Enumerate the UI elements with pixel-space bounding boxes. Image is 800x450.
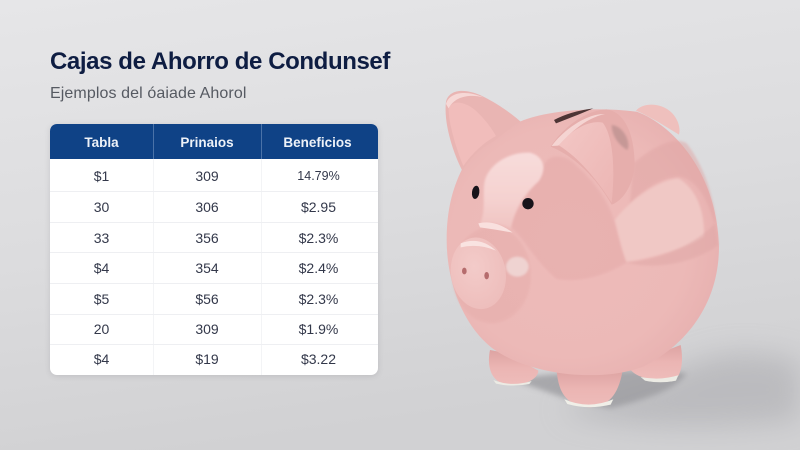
panel: data table: $4 — [94, 260, 109, 276]
body — [447, 109, 719, 375]
panel: data table: 309 — [195, 321, 219, 337]
panel: data table: 14.79% — [297, 169, 340, 183]
shaded band under right ear — [510, 157, 627, 280]
body window highlight — [615, 178, 704, 262]
panel: data table: 354 — [195, 260, 219, 276]
title: Cajas de Ahorro de Condunsef — [50, 48, 390, 75]
panel: data table: 30 — [94, 199, 109, 215]
panel: data table: 309 — [195, 168, 219, 184]
right ear — [551, 109, 635, 205]
face highlight — [480, 153, 543, 228]
panel: data table: $2.4% — [299, 260, 338, 276]
floor shadow — [560, 353, 800, 427]
panel: data table: 356 — [195, 230, 219, 246]
panel: data table: $1.9% — [299, 321, 338, 337]
left ear — [446, 91, 521, 171]
panel: data table: Beneficios — [283, 135, 352, 150]
subtitle: Ejemplos del óaiade Ahorol — [50, 85, 247, 102]
panel: data table: 20 — [94, 321, 109, 337]
panel: data table — [50, 124, 378, 375]
contact shadow — [513, 371, 687, 408]
panel: data table: $1 — [94, 168, 109, 184]
feet — [489, 345, 682, 407]
coin slot — [554, 108, 593, 123]
back ear/tail — [636, 105, 679, 135]
panel: data table: $4 — [94, 351, 109, 367]
panel: data table: 33 — [94, 230, 109, 246]
dark reflection above body highlight — [630, 141, 716, 223]
panel: data table: $2.95 — [301, 199, 336, 215]
snout — [445, 222, 531, 323]
panel: data table: $3.22 — [301, 351, 336, 367]
panel: data table: $19 — [195, 351, 219, 367]
eyes — [471, 185, 534, 209]
panel: data table: Prinaios — [180, 135, 234, 150]
nostrils — [462, 268, 467, 274]
panel: data table: 306 — [195, 199, 219, 215]
panel: data table: $2.3% — [299, 230, 338, 246]
panel: data table: $56 — [195, 291, 219, 307]
panel: data table: $5 — [94, 291, 109, 307]
panel: data table: $2.3% — [299, 291, 338, 307]
panel: data table: Tabla — [84, 135, 119, 150]
